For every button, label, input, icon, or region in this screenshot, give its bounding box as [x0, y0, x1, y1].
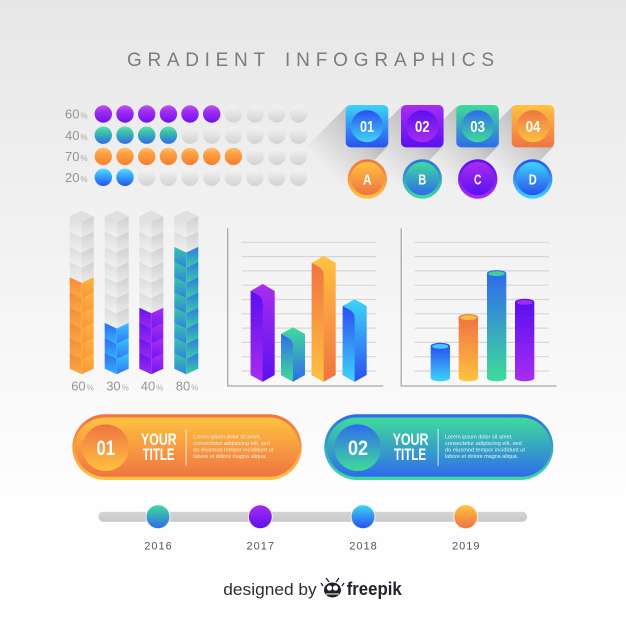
- column 60%: 60%: [71, 379, 94, 394]
- bar blue: [343, 299, 367, 382]
- pill title: YOUR: [141, 431, 177, 449]
- panel: numbered square buttons: [297, 105, 554, 197]
- chart: 3D hexagonal bars: [228, 228, 383, 386]
- title: INFOGRAPHICS: [285, 50, 494, 71]
- node 2019: [452, 504, 479, 552]
- column 30%: 30%: [106, 379, 129, 394]
- pill body text: Lorem ipsum dolor sit amet,: [193, 434, 261, 440]
- column 80%: [174, 210, 198, 394]
- pill body text: consectetur adipiscing elit, sed: [445, 441, 522, 447]
- button A: A: [363, 172, 372, 188]
- column 40%: 40%: [141, 379, 163, 394]
- pill body text: do eiusmod tempor incididunt ut: [445, 448, 526, 454]
- number badge: 02: [348, 437, 368, 460]
- column 40%: [139, 210, 163, 394]
- title: GRADIENT: [127, 50, 265, 71]
- cylinder green: [487, 270, 506, 381]
- panel: stacked cube columns: [70, 210, 198, 394]
- column 80%: 80%: [176, 379, 198, 394]
- row 60%: 60%: [65, 106, 88, 122]
- panel: dot percentage rows: [65, 105, 307, 186]
- row 40%: 40%: [65, 128, 88, 143]
- row 40%: [65, 126, 307, 144]
- cylinder blue: [431, 343, 450, 381]
- pill body text: Lorem ipsum dolor sit amet,: [445, 434, 513, 440]
- pill body text: labore et dolore magna aliqua.: [445, 454, 518, 460]
- panel: orange title pill: [72, 414, 302, 480]
- node 2017: 2017: [247, 540, 274, 552]
- row 70%: 70%: [65, 149, 88, 164]
- button 02: [401, 105, 444, 147]
- node 2017: [247, 504, 274, 552]
- number badge: 01: [96, 437, 115, 460]
- node 2019: 2019: [452, 540, 479, 552]
- pill body text: do eiusmod tempor incididunt ut: [193, 448, 274, 454]
- column 60%: [70, 210, 94, 394]
- button A: [348, 159, 387, 199]
- footer credit: designed by: [223, 580, 317, 599]
- panel: green-blue title pill: [324, 414, 553, 480]
- button D: D: [529, 172, 537, 188]
- row 60%: [65, 105, 307, 123]
- button 01: [346, 105, 388, 147]
- button 03: [456, 105, 499, 147]
- timeline: [98, 504, 527, 552]
- icon: freepik mascot: [321, 578, 344, 598]
- node 2016: 2016: [144, 540, 172, 552]
- button 04: [512, 105, 554, 147]
- column 30%: [105, 210, 129, 394]
- long shadows: [297, 106, 554, 197]
- button 01: 01: [360, 119, 374, 136]
- node 2018: 2018: [349, 540, 377, 552]
- button 03: 03: [470, 119, 485, 136]
- chart: cylinder bars: [401, 228, 557, 386]
- bar green: [281, 327, 305, 382]
- bar orange: [312, 256, 336, 382]
- button 02: 02: [415, 119, 430, 136]
- number badge: [82, 424, 129, 471]
- pill title: TITLE: [143, 446, 175, 464]
- cylinder violet: [515, 299, 534, 381]
- button C: [458, 159, 497, 199]
- cylinder orange: [459, 314, 478, 381]
- pill body text: consectetur adipiscing elit, sed: [193, 441, 270, 447]
- number badge: [334, 424, 381, 471]
- pill title: TITLE: [394, 446, 426, 464]
- footer credit: freepik: [347, 579, 403, 599]
- node 2016: [144, 504, 172, 552]
- node 2018: [349, 504, 377, 552]
- button B: B: [418, 172, 426, 188]
- row 20%: 20%: [65, 170, 88, 185]
- title: [127, 50, 494, 71]
- button C: C: [474, 172, 482, 188]
- button D: [513, 159, 552, 199]
- panel: lettered round buttons: [348, 159, 552, 199]
- row 20%: [65, 169, 307, 186]
- bar violet: [251, 284, 275, 382]
- button B: [403, 159, 442, 199]
- pill title: YOUR: [393, 431, 428, 449]
- pill body text: labore et dolore magna aliqua.: [193, 454, 267, 460]
- button 04: 04: [526, 119, 540, 136]
- footer credit: [223, 578, 403, 599]
- row 70%: [65, 148, 307, 165]
